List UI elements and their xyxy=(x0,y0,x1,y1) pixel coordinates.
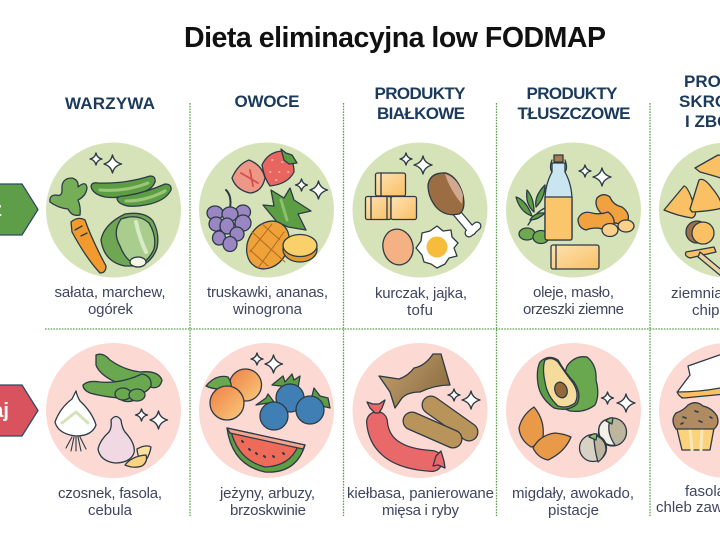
panel: allowed starches xyxy=(659,142,720,278)
icon: butter xyxy=(551,245,599,269)
icon: oil bottle xyxy=(545,155,572,240)
caption: kurczak, jajka, xyxy=(375,285,467,302)
icon: lettuce xyxy=(101,213,158,267)
panel: avoid starches xyxy=(659,343,720,478)
caption: jeżyny, arbuzy, xyxy=(219,485,315,502)
caption: mięsa i ryby xyxy=(382,502,460,519)
caption: winogrona xyxy=(232,301,303,318)
icon: carrot xyxy=(50,178,106,273)
icon: chips xyxy=(664,155,720,218)
icon: breaded fish xyxy=(379,354,450,408)
caption: czosnek, fasola, xyxy=(58,485,162,502)
row tag: avoid xyxy=(0,385,38,436)
title: Dieta eliminacyjna low FODMAP xyxy=(184,22,606,54)
icon: chicken drumstick xyxy=(428,173,477,233)
icon: garlic xyxy=(98,416,151,467)
column headings: WARZYWA xyxy=(65,94,155,113)
column headings xyxy=(65,72,720,131)
icon: blackberries xyxy=(256,374,330,430)
panel: allowed fats xyxy=(506,142,641,278)
row tag: allowed xyxy=(0,184,38,235)
icon: pistachios xyxy=(580,418,626,462)
icon: grapes xyxy=(207,190,251,252)
caption: oleje, masło, xyxy=(533,284,614,301)
icon: sparkles xyxy=(602,392,635,412)
icon: bread xyxy=(677,353,720,398)
icon: potato xyxy=(686,221,714,244)
icon: pineapple slice xyxy=(283,234,317,262)
panel: allowed fruit xyxy=(199,142,334,278)
icon: onion xyxy=(55,391,96,451)
icon: sparkles xyxy=(251,353,282,373)
icon: pineapple xyxy=(238,188,311,277)
panel: avoid vegetables xyxy=(46,343,181,478)
caption xyxy=(54,284,166,318)
icon: fried egg xyxy=(416,226,458,268)
panel: avoid fruit xyxy=(199,343,334,478)
icon: sausage xyxy=(367,400,445,468)
caption xyxy=(656,483,720,516)
column headings: OWOCE xyxy=(234,92,300,111)
column headings: BIAŁKOWE xyxy=(377,104,465,123)
column headings: PRODUKTY xyxy=(374,84,466,103)
panel: avoid protein xyxy=(352,343,488,478)
caption: orzeszki ziemne xyxy=(523,301,624,318)
caption xyxy=(207,284,328,318)
caption xyxy=(375,285,467,319)
icon: peanuts xyxy=(578,195,634,236)
icon: sparkles xyxy=(448,389,480,409)
icon: almonds xyxy=(519,407,571,460)
panel: avoid fats xyxy=(506,343,641,478)
caption xyxy=(671,285,720,319)
icon: sparkles xyxy=(579,165,611,186)
icon: breaded cutlets xyxy=(412,405,469,439)
caption: ogórek xyxy=(88,301,134,318)
icon: cucumbers xyxy=(91,176,171,206)
icon: sparkles xyxy=(90,153,122,173)
icon: strawberries xyxy=(232,149,297,193)
caption: kiełbasa, panierowane xyxy=(347,485,494,502)
panel: allowed vegetables xyxy=(46,142,181,278)
caption: migdały, awokado, xyxy=(512,485,634,502)
caption xyxy=(512,485,634,519)
caption xyxy=(58,485,162,519)
icon: beans xyxy=(83,354,162,402)
icon: egg xyxy=(380,226,416,268)
caption xyxy=(219,485,315,519)
caption: sałata, marchew, xyxy=(54,284,166,301)
panel: allowed protein xyxy=(352,142,488,278)
caption: cebula xyxy=(88,502,133,519)
caption: brzoskwinie xyxy=(230,502,306,519)
caption: truskawki, ananas, xyxy=(207,284,328,301)
icon: tofu xyxy=(366,173,416,220)
icon: sparkles xyxy=(400,153,432,174)
icon: sparkles xyxy=(136,409,168,429)
icon: peaches xyxy=(206,369,262,420)
icon: watermelon xyxy=(227,428,305,472)
caption: pistacje xyxy=(548,502,599,519)
caption xyxy=(523,284,624,318)
icon: muffin xyxy=(673,403,718,450)
caption: tofu xyxy=(407,302,433,319)
icon: fries xyxy=(686,247,720,276)
icon: avocado xyxy=(537,357,598,411)
column headings: TŁUSZCZOWE xyxy=(518,104,630,123)
icon: olive branch xyxy=(516,185,549,244)
icon: sparkles xyxy=(296,179,328,199)
column headings: PRODUKTY xyxy=(526,84,618,103)
caption xyxy=(347,485,494,519)
